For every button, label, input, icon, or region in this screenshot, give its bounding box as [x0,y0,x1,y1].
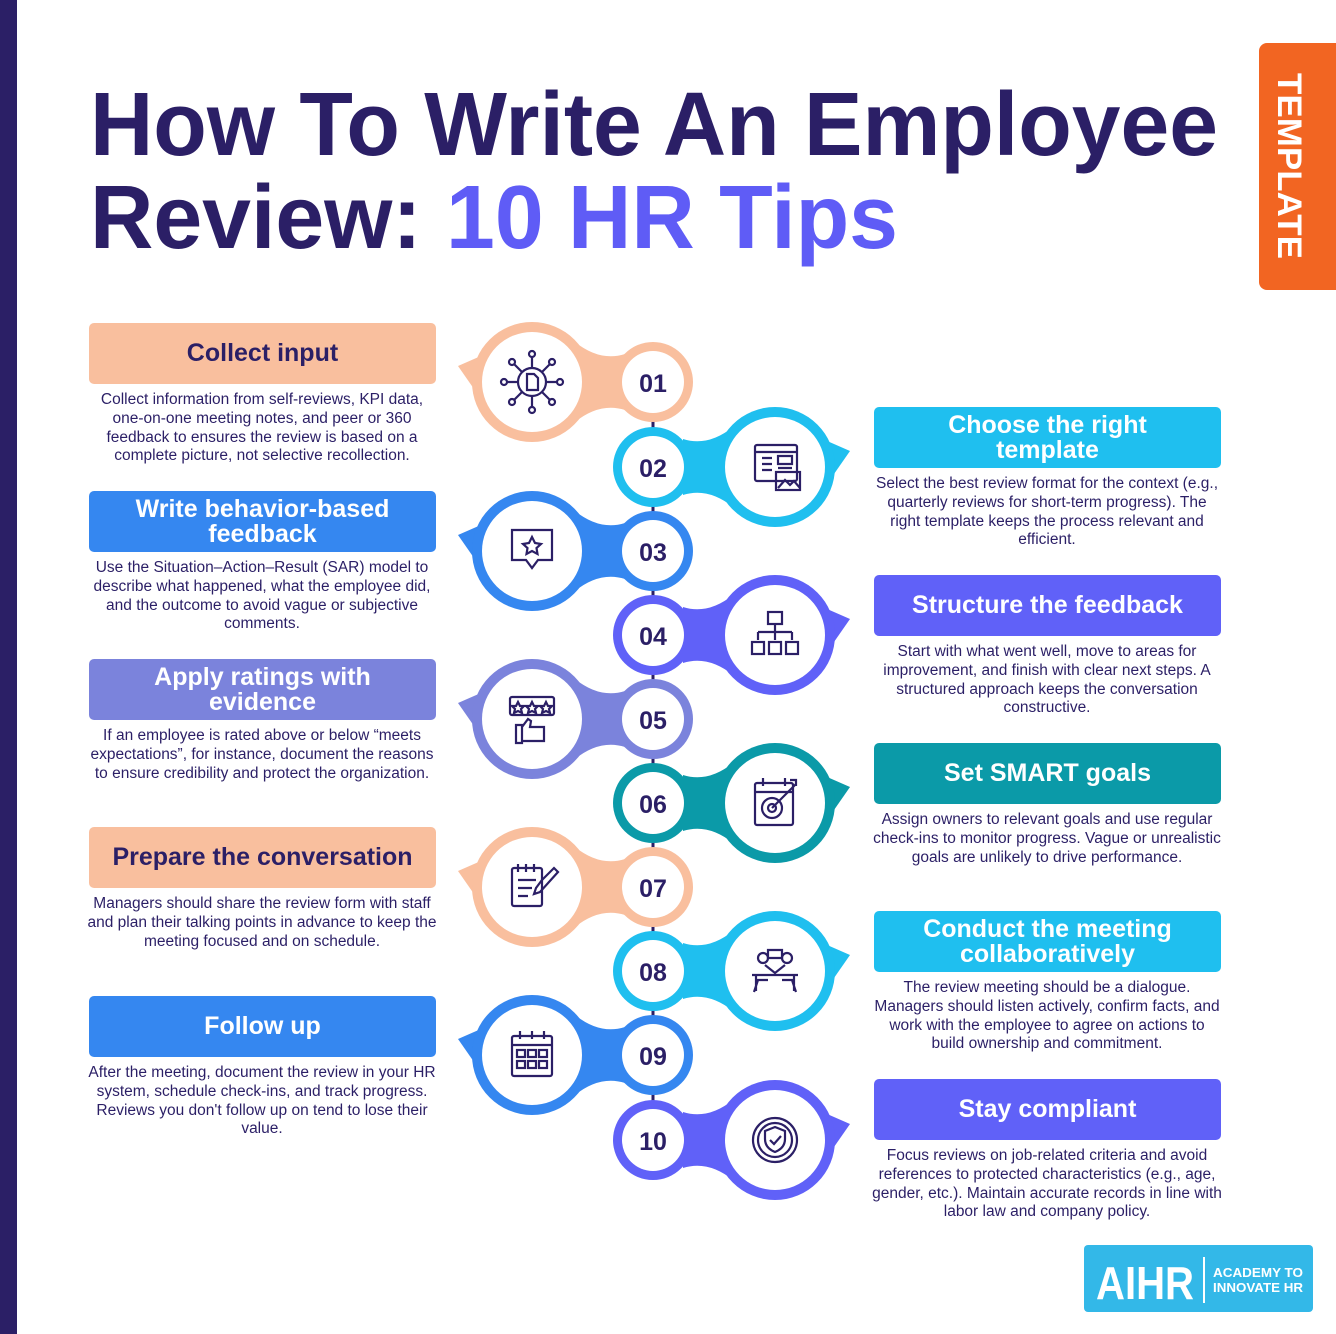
panel: ratings [89,659,436,782]
panel: stay compliant [872,1079,1222,1220]
panel: behavior-based feedback: Use the Situation–Action–Result (SAR) model to describe what happened, what the employee did, and the outcome to avoid vague or subjective comments. [94,559,430,632]
panel: prepare conversation: Managers should share the review form with staff and plan their talking points in advance to keep the meeting focused and on schedule. [88,895,436,950]
logo: AIHR: INNOVATE HR [1213,1280,1304,1295]
icon: template layout [755,445,800,490]
panel: structure feedback: Structure the feedback [912,591,1183,619]
panel: SMART goals [873,743,1221,866]
panel: behavior-based feedback [89,491,436,632]
panel: conduct meeting: The review meeting should be a dialogue. Managers should listen actively, confirm facts, and work with the employee to agree on actions to build ownership and commitment. [874,979,1220,1052]
panel: collect input: Collect input [187,339,338,367]
step numbers: 05 [639,707,667,735]
step numbers: 02 [639,455,667,483]
panel: stay compliant: Stay compliant [959,1095,1136,1123]
icon: meeting [752,950,798,992]
step 05 ring [458,659,693,779]
step numbers: 06 [639,791,667,819]
panel: stay compliant: Focus reviews on job-related criteria and avoid references to protected characteristics (e.g., age, gender, etc.). Maintain accurate records in line with labor law and company policy. [872,1147,1222,1220]
panel: behavior-based feedback: feedback [208,520,317,548]
panel: SMART goals: Assign owners to relevant goals and use regular check-ins to monitor progress. Vague or unrealistic goals are unlikely to drive performance. [873,811,1221,866]
panel: structure feedback: Start with what went well, move to areas for improvement, and finish with clear next steps. A structured approach keeps the conversation constructive. [883,643,1211,716]
step 01 ring [458,322,693,442]
panel: conduct meeting: Conduct the meeting [923,914,1172,942]
logo: AIHR: AIHR [1096,1257,1194,1309]
panel: conduct meeting: collaboratively [960,940,1135,968]
panel: prepare conversation: Prepare the conversation [112,843,413,871]
icon: calendar grid [512,1031,552,1076]
step numbers: 01 [639,370,667,398]
step 07 ring [458,827,693,947]
template tab [1259,43,1336,290]
step numbers: 09 [639,1043,667,1071]
step 08 ring [613,911,850,1031]
step 10 ring [613,1080,850,1200]
template tab: TEMPLATE [1270,73,1308,259]
step 03 ring [458,491,693,611]
panel: prepare conversation [88,827,436,950]
step 04 ring [613,575,850,695]
icon: network document [501,351,563,413]
step 06 ring [613,743,850,863]
panel: ratings: Apply ratings with [154,662,371,690]
panel: follow up [88,996,436,1137]
panel: follow up: Follow up [204,1012,321,1040]
panel: conduct meeting [874,911,1221,1052]
icon: shield check [753,1118,797,1162]
icon: org chart [752,612,798,654]
icon: checklist pen [512,864,558,906]
panel: choose template: Select the best review format for the context (e.g., quarterly reviews for short-term progress). The right template keeps the process relevant and efficient. [876,475,1218,548]
panel: ratings: evidence [209,688,316,716]
panel: follow up: After the meeting, document the review in your HR system, schedule check-ins, and track progress. Reviews you don't follow up on tend to lose their value. [88,1064,436,1137]
step numbers: 03 [639,539,667,567]
logo: AIHR: ACADEMY TO [1213,1265,1303,1280]
icons [501,351,800,1162]
panel: SMART goals: Set SMART goals [944,759,1151,787]
icon: rating thumb [510,697,554,743]
panel: collect input [89,323,436,464]
step numbers: 04 [639,623,667,651]
panel: choose template [874,407,1221,548]
icon: star speech bubble [512,530,552,568]
step numbers: 08 [639,959,667,987]
step 09 ring [458,995,693,1115]
panel: structure feedback [874,575,1221,716]
left sidebar strip [0,0,17,1334]
panel: behavior-based feedback: Write behavior-based [136,494,389,522]
panel: choose template: Choose the right [948,410,1147,438]
panel: choose template: template [996,436,1099,464]
step numbers: 07 [639,875,667,903]
step numbers [639,370,667,1156]
panel: collect input: Collect information from self-reviews, KPI data, one-on-one meeting notes, and peer or 360 feedback to ensures the review is based on a complete picture, not selective recollection. [101,391,423,464]
title [90,75,1218,268]
step 02 ring [613,407,850,527]
title: Review: 10 HR Tips [90,168,898,268]
title: How To Write An Employee [90,75,1218,175]
icon: target calendar [755,778,796,825]
logo: AIHR [1084,1245,1313,1312]
step numbers: 10 [639,1128,667,1156]
panel: ratings: If an employee is rated above or below “meets expectations”, for instance, document the reasons to ensure credibility and protect the organization. [91,727,433,782]
